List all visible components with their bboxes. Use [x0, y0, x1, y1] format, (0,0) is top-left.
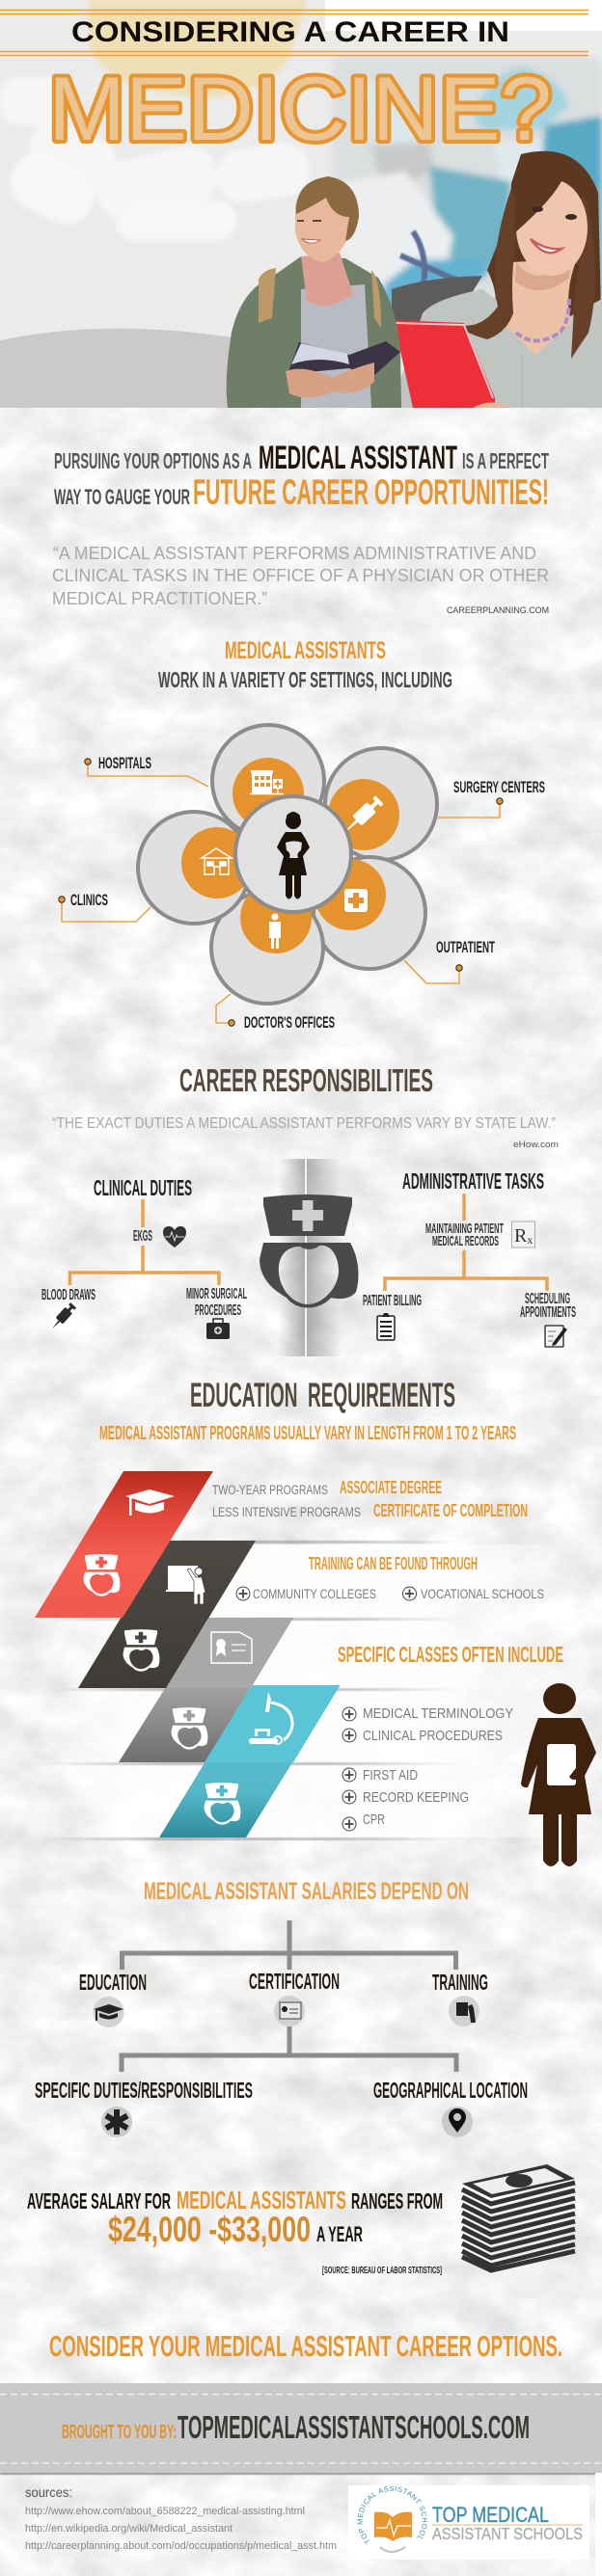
intro line 1: PURSUING YOUR OPTIONS AS A	[54, 448, 252, 473]
callout: hospitals	[85, 754, 208, 787]
specific duties label: SPECIFIC DUTIES/RESPONSIBILITIES	[35, 2078, 253, 2103]
icon: clinic house	[202, 848, 232, 874]
orange disc	[315, 859, 386, 930]
dot	[59, 897, 65, 902]
white top right corner	[325, 0, 602, 31]
icon: medical box	[344, 889, 368, 912]
red folder	[394, 320, 495, 408]
brought to you: BROUGHT TO YOU BY:	[62, 2422, 177, 2443]
medicine inline: MEDICINE?	[48, 58, 552, 159]
tray	[166, 1590, 193, 1592]
disc	[442, 2106, 473, 2137]
arm	[271, 1703, 292, 1740]
callout: surgery centers	[438, 778, 545, 818]
man eyes	[297, 220, 321, 222]
icon: certificate	[274, 1996, 305, 2026]
banner shadow	[0, 2472, 596, 2475]
connectors bottom	[122, 2026, 456, 2072]
cap	[94, 2004, 123, 2019]
plus icon	[236, 1587, 250, 1600]
icon: hospital	[250, 770, 284, 794]
dot	[456, 965, 462, 971]
woman back hair	[482, 151, 602, 359]
stack stripes	[462, 2183, 575, 2270]
panel: header photo	[0, 0, 602, 408]
eyepiece	[265, 1692, 271, 1712]
band: red	[35, 1471, 213, 1618]
callout: clinics	[59, 891, 150, 922]
open book	[287, 341, 400, 378]
man hands	[286, 362, 374, 398]
woman photo	[391, 151, 602, 408]
cross	[216, 1328, 220, 1332]
petal disc	[314, 857, 425, 969]
center line	[305, 1159, 307, 1356]
icon: microscope	[249, 1692, 292, 1744]
petal: left	[138, 812, 253, 924]
dark arc behind woman	[392, 276, 482, 323]
gray hill	[0, 329, 289, 408]
certification label: CERTIFICATION	[249, 1969, 340, 1994]
banner: brought to you by	[0, 2383, 602, 2475]
band: teal overlap	[205, 1685, 340, 1762]
pen	[552, 1328, 567, 1346]
leader line	[438, 801, 500, 818]
base	[249, 1738, 278, 1744]
petal: bottom	[211, 882, 323, 1004]
icon: notepad	[545, 1326, 567, 1347]
petal disc	[138, 812, 250, 924]
roof	[251, 770, 273, 773]
top rule lines	[0, 10, 588, 56]
page	[211, 1632, 252, 1663]
heading: settings	[158, 637, 452, 692]
woman sweater	[391, 289, 602, 408]
band: gray	[119, 1618, 293, 1762]
intro line 2: WAY TO GAUGE YOUR	[54, 485, 190, 509]
folder stripe	[396, 323, 493, 398]
icon: location pin	[442, 2106, 473, 2137]
icon: medical assistant figure	[277, 812, 310, 899]
dot	[497, 798, 503, 804]
plus icon	[342, 1707, 356, 1721]
man jacket	[227, 256, 401, 408]
dress	[521, 1718, 596, 1814]
text: PROCEDURES	[195, 1302, 241, 1319]
quote line 2: CLINICAL TASKS IN THE OFFICE OF A PHYSICIAN OR OTHER	[52, 565, 549, 585]
eye right	[565, 214, 577, 220]
orange disc	[328, 779, 399, 850]
lines	[380, 1322, 392, 1336]
medical assistants heading: MEDICAL ASSISTANTS	[225, 637, 386, 664]
connectors top	[122, 1920, 455, 1970]
head	[543, 1683, 576, 1714]
icon: syringe	[48, 1302, 77, 1332]
text: average salary	[27, 2186, 443, 2276]
source: [SOURCE: BUREAU OF LABOR STATISTICS]	[322, 2265, 442, 2276]
left leg	[543, 1812, 559, 1866]
clipboard	[547, 1744, 576, 1785]
image: pills and bottle	[0, 0, 312, 241]
label: OUTPATIENT	[436, 938, 495, 956]
man backpack straps	[259, 268, 381, 328]
plus icon	[342, 1768, 356, 1782]
text lines	[232, 1645, 246, 1650]
image: surgeons	[333, 58, 602, 328]
source 3: http://careerplanning.about.com/od/occupations/p/medical_asst.htm	[25, 2540, 337, 2552]
woman smile	[531, 239, 561, 253]
quote: definition	[52, 543, 549, 608]
book pages	[291, 343, 349, 364]
row shadow 2	[39, 1618, 463, 1621]
medical assistant emphasis: MEDICAL ASSISTANT	[259, 440, 457, 476]
woman face	[516, 179, 588, 276]
pin	[449, 2108, 466, 2133]
petal: top right	[325, 748, 437, 860]
medicine outline: MEDICINE?	[48, 58, 552, 159]
icon: star of life	[101, 2106, 132, 2137]
board	[168, 1566, 198, 1592]
petal: top	[212, 725, 324, 837]
tree: clinical duties: BLOOD DRAWS	[41, 1287, 96, 1303]
leader line	[62, 899, 150, 922]
ribbon	[216, 1648, 226, 1656]
hand over clipboard	[569, 1757, 589, 1780]
pulse on book	[376, 2520, 411, 2536]
sources heading: sources:	[25, 2484, 72, 2500]
icon: training	[449, 1996, 479, 2026]
head	[286, 814, 301, 829]
box	[344, 889, 368, 912]
icon: student with clipboard	[521, 1683, 596, 1866]
rule 1	[0, 10, 588, 56]
man smile	[302, 239, 320, 243]
leader line	[216, 994, 232, 1023]
tassel	[96, 2010, 97, 2021]
medical assistants: MEDICAL ASSISTANTS	[177, 2186, 346, 2214]
bill medallion	[506, 2174, 533, 2187]
less intensive: LESS INTENSIVE PROGRAMS	[212, 1505, 361, 1519]
quote source: CAREERPLANNING.COM	[447, 605, 549, 616]
tree: salary factors	[35, 1920, 528, 2137]
laurel	[380, 2547, 405, 2552]
tree: clinical duties	[41, 1175, 247, 1339]
man hair	[296, 176, 359, 241]
icon: Rx box	[511, 1221, 534, 1248]
logo name top: TOP MEDICAL	[432, 2503, 549, 2527]
icon: teacher at board	[166, 1566, 205, 1604]
quote source: ehow: eHow.com	[513, 1140, 559, 1150]
logo panel	[348, 2485, 589, 2560]
orange disc	[181, 827, 253, 899]
text: degree options	[212, 1477, 528, 1520]
text block: intro statement	[54, 440, 549, 512]
connector lines	[69, 1199, 219, 1285]
medical terminology: MEDICAL TERMINOLOGY	[363, 1706, 513, 1722]
seal	[282, 2006, 287, 2012]
leader line	[404, 960, 459, 983]
man face	[295, 183, 352, 262]
surgeon strap	[400, 231, 473, 289]
disc	[449, 1996, 479, 2026]
cap base	[135, 1502, 164, 1514]
badge	[214, 1327, 222, 1334]
dot	[85, 759, 91, 765]
chest cutout	[286, 841, 302, 858]
tree: administrative tasks: MEDICAL RECORDS	[432, 1233, 499, 1249]
pad	[545, 1326, 563, 1347]
top bill	[462, 2164, 575, 2198]
tree: administrative tasks: PATIENT BILLING	[363, 1293, 422, 1309]
petal disc	[211, 892, 323, 1004]
vocational schools: VOCATIONAL SCHOOLS	[421, 1587, 544, 1601]
board	[377, 1316, 395, 1340]
petal disc	[212, 725, 324, 837]
quote line 3: MEDICAL PRACTITIONER.”	[52, 588, 267, 608]
petal disc	[325, 748, 437, 860]
two-year: TWO-YEAR PROGRAMS	[212, 1483, 328, 1497]
woman sweater seam	[521, 357, 523, 408]
cap	[287, 812, 300, 819]
man photo	[227, 176, 401, 408]
tree: administrative tasks	[363, 1168, 576, 1347]
callout: outpatient	[404, 938, 495, 983]
center circle	[235, 796, 351, 912]
woman eyes	[532, 206, 577, 220]
pulse	[165, 1232, 184, 1241]
icon: stack of money	[462, 2164, 575, 2270]
education label: EDUCATION	[79, 1970, 147, 1995]
dress	[277, 832, 310, 875]
woman chest	[500, 258, 577, 355]
dot	[229, 1020, 234, 1026]
book icon	[374, 2512, 412, 2541]
callout: doctor's offices	[216, 994, 335, 1032]
header background	[0, 0, 602, 408]
average salary: AVERAGE SALARY FOR	[27, 2188, 171, 2214]
icon: nurse on gray	[172, 1707, 207, 1750]
teacher body	[187, 1569, 205, 1604]
associate degree: ASSOCIATE DEGREE	[340, 1477, 442, 1497]
person	[468, 2004, 476, 2023]
icon: syringe	[341, 795, 384, 837]
icon: grad cap	[93, 1997, 123, 2027]
woman bangs	[514, 162, 590, 233]
quote line 1: “A MEDICAL ASSISTANT PERFORMS ADMINISTRATIVE AND	[53, 543, 536, 563]
lines	[289, 2009, 298, 2013]
icon: graduation cap	[125, 1489, 175, 1516]
disc	[101, 2106, 132, 2137]
woman neck shadow	[515, 262, 571, 290]
row shadow 5	[39, 1838, 463, 1840]
heading: CLINICAL DUTIES	[94, 1175, 192, 1200]
page	[280, 2002, 301, 2019]
Rx: x	[527, 1233, 533, 1247]
bill face	[473, 2168, 564, 2194]
icon: certificate	[211, 1632, 252, 1663]
connector lines	[385, 1194, 547, 1291]
icon: nurse on dark	[123, 1629, 159, 1672]
book gutter shading	[278, 1159, 342, 1356]
tree: clinical duties: EKGS	[133, 1228, 152, 1245]
tree: administrative tasks: MAINTAINING PATIENT	[425, 1221, 504, 1237]
man neck and chest	[301, 253, 353, 306]
icon: medical bag	[206, 1319, 230, 1339]
icon: clipboard	[377, 1313, 395, 1340]
row shadow 1	[96, 1541, 463, 1543]
source 1: http://www.ehow.com/about_6588222_medical-assisting.html	[25, 2506, 305, 2517]
sign cross	[274, 781, 282, 787]
CPR: CPR	[363, 1812, 385, 1828]
band: dark	[78, 1541, 256, 1688]
pad lines	[548, 1331, 556, 1341]
source 2: http://en.wikipedia.org/wiki/Medical_assistant	[25, 2523, 233, 2535]
seal	[216, 1639, 226, 1649]
icon: nurse on teal	[205, 1783, 240, 1825]
icon: heart	[163, 1226, 186, 1248]
board	[125, 1489, 175, 1504]
plus icon	[342, 1729, 356, 1742]
box	[511, 1221, 534, 1248]
right white strip	[595, 2473, 602, 2576]
sign post	[250, 789, 284, 794]
ranges from: RANGES FROM	[351, 2188, 443, 2214]
handle	[213, 1319, 223, 1323]
text: MINOR SURGICAL	[186, 1286, 247, 1302]
tassel	[129, 1497, 131, 1516]
label: HOSPITALS	[98, 754, 151, 772]
icon: large nurse	[260, 1194, 358, 1307]
plus icon	[342, 1817, 356, 1831]
label: DOCTOR'S OFFICES	[244, 1013, 335, 1032]
star arms	[106, 2109, 127, 2134]
clinical procedures: CLINICAL PROCEDURES	[363, 1729, 503, 1744]
circular text: TOP MEDICAL ASSISTANT SCHOOLS	[357, 2485, 427, 2545]
eye left	[532, 206, 543, 212]
stitch lines	[0, 2395, 602, 2463]
woman necklace	[516, 299, 569, 341]
salary range: $24,000 -$33,000	[108, 2210, 311, 2249]
panel: education staircase	[35, 1471, 598, 1840]
teacher head	[195, 1568, 203, 1575]
focus knob	[274, 1736, 282, 1744]
text: training locations	[236, 1554, 544, 1601]
a year: A YEAR	[316, 2222, 363, 2246]
band: teal	[159, 1685, 340, 1838]
orange disc	[233, 758, 304, 829]
community colleges: COMMUNITY COLLEGES	[253, 1587, 376, 1601]
heart shape	[163, 1226, 186, 1248]
orange disc	[240, 882, 312, 953]
board	[456, 2002, 468, 2016]
banner band	[0, 2383, 602, 2473]
row shadow 4	[39, 1762, 463, 1765]
legs	[286, 873, 301, 899]
row white fill	[58, 1544, 598, 1838]
leader line	[88, 762, 208, 787]
woman hand	[473, 403, 511, 408]
right leg	[561, 1812, 577, 1866]
training label: TRAINING	[432, 1970, 488, 1995]
left shade	[278, 1159, 305, 1356]
Rx: R	[514, 1225, 527, 1247]
petal: lower right	[314, 857, 425, 969]
icon: nurse on red	[83, 1554, 120, 1597]
disc	[274, 1996, 305, 2026]
band: gray overlap	[166, 1618, 293, 1688]
label: CLINICS	[70, 891, 108, 909]
title line: CONSIDERING A CAREER IN	[71, 16, 509, 48]
icon: doctor	[269, 914, 281, 949]
row shadow 3	[39, 1688, 463, 1691]
flower diagram: work settings	[138, 725, 437, 1004]
logo divider	[432, 2524, 583, 2526]
cross	[348, 893, 364, 908]
row backgrounds	[39, 1541, 598, 1840]
windows	[255, 776, 270, 787]
right shade	[307, 1159, 342, 1356]
woman hair curls	[453, 188, 595, 359]
man t-shirt	[301, 284, 371, 408]
clip	[382, 1313, 390, 1317]
stage	[255, 1729, 270, 1736]
disc	[93, 1997, 123, 2027]
text block: sources	[25, 2484, 337, 2552]
first aid: FIRST AID	[363, 1768, 418, 1784]
bag	[206, 1323, 230, 1339]
title: medicine	[48, 58, 552, 159]
text: specific classes	[338, 1642, 563, 1831]
building	[252, 772, 272, 793]
plus icon	[403, 1587, 417, 1600]
sign	[273, 779, 283, 789]
record keeping: RECORD KEEPING	[363, 1790, 469, 1806]
plus icon	[342, 1790, 356, 1804]
